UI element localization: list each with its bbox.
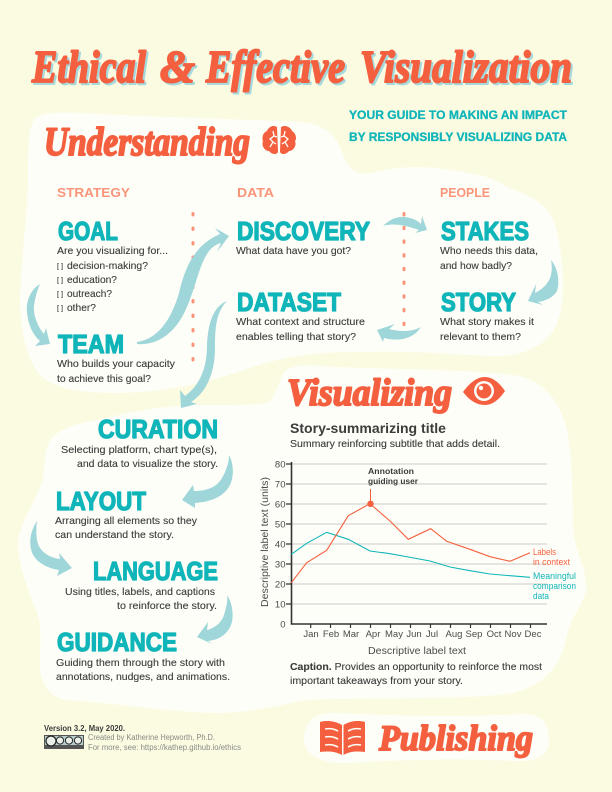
block: goal: [ ] [57,276,63,284]
block: dataset: What context and structure [236,316,365,328]
chart subtitle: Summary reinforcing subtitle that adds detail. [290,438,500,450]
x axis months: Dec [525,629,542,640]
panel: understanding background [20,113,563,393]
block: guidance [56,627,230,683]
credits text [88,733,241,752]
block: team: TEAM [58,329,124,359]
line chart [260,460,576,657]
block: goal: education? [67,274,117,286]
credits text: Created by Katherine Hepworth, Ph.D. [88,733,215,742]
x axis months: Sep [466,629,482,640]
comparison series line [291,532,530,577]
y axis values: 80 [275,460,286,470]
x axis months: Apr [366,629,380,640]
block: goal: other? [67,302,96,314]
block: discovery: What data have you got? [236,245,351,257]
block: goal: [ ] [57,304,63,312]
block: goal: Are you visualizing for... [57,245,168,257]
label: comparison series: comparison [533,581,576,591]
y axis title: Descriptive label text (units) [260,477,271,607]
label: main series: Labels [533,547,556,557]
block: story: relevant to them? [440,331,521,343]
block: curation: Selecting platform, chart type(s), [61,444,217,456]
chart caption [290,661,542,687]
icon: open book [320,721,365,755]
arrow: story to dataset [377,324,421,342]
title: Ethical [31,42,146,92]
arrow: dataset to curation [180,301,227,408]
block: language: LANGUAGE [93,556,218,586]
block: goal [57,216,168,314]
block: guidance: Guiding them through the story with [56,657,225,669]
column labels: STRATEGY [57,185,130,200]
x axis months: Aug [446,629,462,640]
y axis values: 0 [280,620,286,630]
block: goal: [ ] [57,262,63,270]
arrow: curation to layout [182,455,233,508]
column labels: DATA [237,185,275,200]
chart title: Story-summarizing title [290,420,446,436]
block: story: What story makes it [440,316,534,328]
column labels: PEOPLE [440,185,490,200]
block: curation: CURATION [98,414,218,444]
block: story [440,287,534,343]
x axis months: Jul [426,629,438,640]
block: layout [55,486,198,541]
version text: Version 3.2, May 2020. [44,724,125,733]
panel: visualizing and left process background [18,366,586,713]
icon: creative commons badge [44,735,84,749]
block: discovery: DISCOVERY [237,216,370,246]
y axis values: 10 [275,600,286,610]
tagline: BY RESPONSIBLY VISUALIZING DATA [349,130,567,144]
y axis values [275,460,286,630]
block: dataset: enables telling that story? [236,331,356,343]
arrow: team to discovery [137,228,229,344]
arrow: stakes to story [528,260,558,305]
annotation [367,467,418,507]
y axis values: 40 [275,540,286,550]
column labels [57,185,490,200]
x axis months: Jun [406,629,422,640]
credits text: For more, see: https://kathep.github.io/ethics [88,743,241,752]
x axis months: Oct [487,629,502,640]
x axis months: Nov [505,629,522,640]
block: guidance: annotations, nudges, and animations. [56,671,230,683]
title [31,42,572,92]
block: stakes: and how badly? [440,260,512,272]
tagline: YOUR GUIDE TO MAKING AN IMPACT [349,108,568,122]
block: goal: outreach? [67,288,112,300]
title: Visualization [360,42,572,92]
chart caption: important takeaways from your story. [290,675,463,687]
block: team: to achieve this goal? [57,373,151,385]
y axis values: 70 [275,480,286,490]
block: team: Who builds your capacity [57,358,176,370]
block: language: to reinforce the story. [117,600,217,612]
block: goal: GOAL [58,216,118,246]
x axis months: May [385,629,403,640]
block: layout: LAYOUT [56,486,146,516]
y axis values: 20 [275,580,286,590]
label: main series: in context [533,557,570,567]
block: layout: Arranging all elements so they [55,515,198,527]
tagline [349,108,568,144]
block: stakes: Who needs this data, [440,245,538,257]
label: comparison series: data [533,591,549,601]
block: dataset [236,287,365,343]
icon: brain [262,126,296,154]
y axis values: 60 [275,500,286,510]
panel: publishing background [304,713,549,763]
block: language [65,556,218,612]
annotation: Annotation [368,467,414,476]
x axis months [303,629,542,640]
arrow: layout to language [30,521,72,576]
title: & [160,42,195,92]
arrow: language to guidance [197,595,233,644]
block: language: Using titles, labels, and captions [65,586,215,598]
main series line [291,504,530,583]
x axis months: Feb [323,629,339,640]
y axis values: 50 [275,520,286,530]
block: stakes: STAKES [441,216,529,246]
chart caption: Caption. Provides an opportunity to reinforce the most [290,661,542,673]
arrow: goal to team [27,284,50,346]
block: dataset: DATASET [237,287,341,317]
annotation: guiding user [368,477,418,486]
block: goal: decision-making? [67,260,148,272]
block: team [57,329,176,385]
x axis title: Descriptive label text [368,646,466,657]
block: discovery [236,216,370,257]
heading: publishing: Publishing [378,718,533,758]
heading: visualizing: Visualizing [287,372,452,414]
label: comparison series [533,571,576,601]
block: goal: [ ] [57,290,63,298]
icon: eye [463,377,505,405]
x axis months: Jan [303,629,319,640]
block: curation [61,414,218,470]
title: Effective [205,42,345,92]
block: curation: and data to visualize the story. [77,458,218,470]
label: main series [533,547,570,567]
block: layout: can understand the story. [55,529,174,541]
y axis values: 30 [275,560,286,570]
label: comparison series: Meaningful [533,571,576,581]
block: guidance: GUIDANCE [57,627,177,657]
heading: understanding: Understanding [44,119,250,164]
block: stakes [440,216,538,272]
block: story: STORY [441,287,516,317]
arrow: discovery to stakes [383,216,427,233]
x axis months: Mar [343,629,359,640]
